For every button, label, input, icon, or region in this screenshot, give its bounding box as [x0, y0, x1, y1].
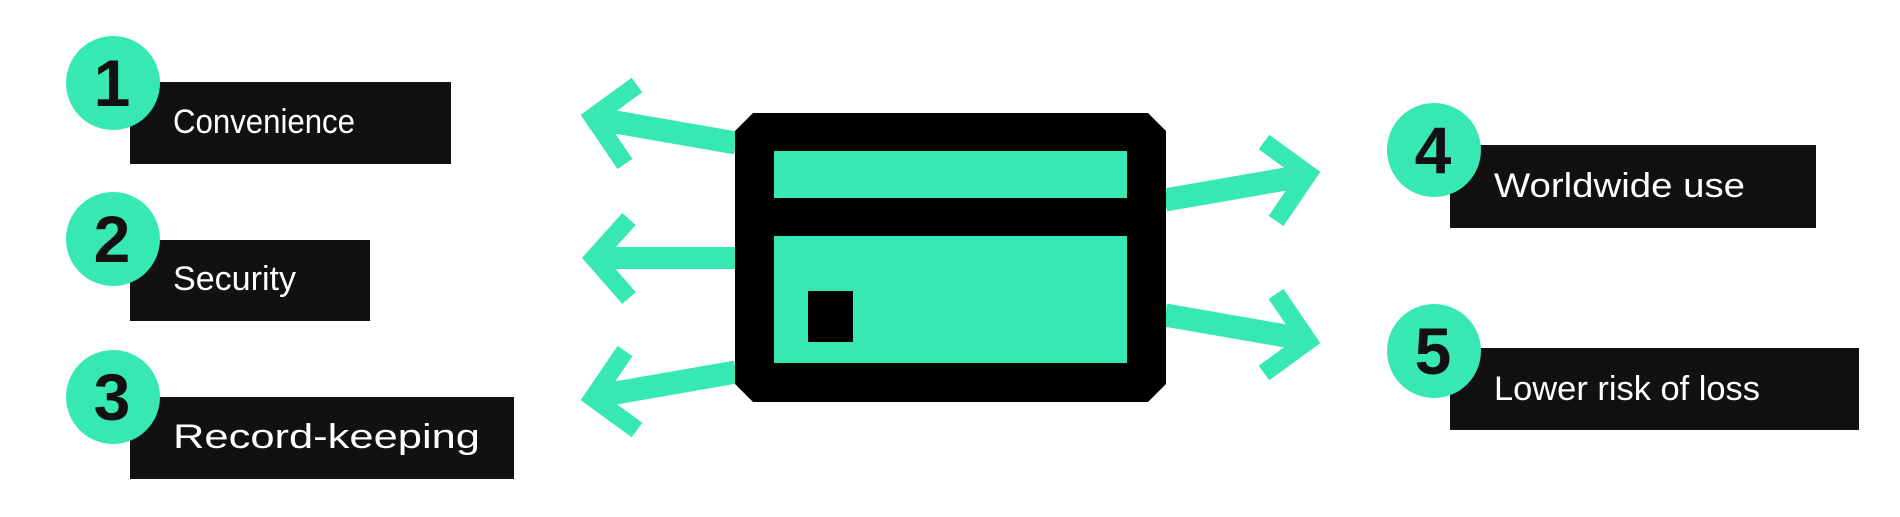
item 1: Convenience: Convenience	[173, 103, 355, 141]
item 3: Record-keeping: 3	[94, 360, 130, 434]
arrow: to Lower risk of loss	[1165, 294, 1308, 373]
item 5: Lower risk of loss: Lower risk of loss	[1494, 370, 1760, 408]
arrow: to Record-keeping	[593, 351, 736, 430]
item 5: Lower risk of loss	[1387, 304, 1859, 430]
item 4: Worldwide use: 4	[1415, 113, 1452, 187]
arrow: to Worldwide use	[1165, 142, 1308, 221]
item 2: Security: 2	[94, 202, 130, 276]
icon: credit card	[735, 113, 1166, 402]
item 3: Record-keeping: Record-keeping	[173, 418, 480, 456]
item 1: Convenience	[66, 36, 451, 164]
item 4: Worldwide use: Worldwide use	[1494, 167, 1745, 205]
arrow: to Security	[594, 219, 736, 298]
item 2: Security: Security	[173, 260, 296, 298]
item 4: Worldwide use	[1387, 103, 1816, 228]
arrow: to Convenience	[593, 85, 736, 164]
item 2: Security	[66, 192, 370, 321]
item 3: Record-keeping	[66, 350, 514, 479]
item 5: Lower risk of loss: 5	[1415, 314, 1451, 388]
item 1: Convenience: 1	[94, 46, 130, 120]
